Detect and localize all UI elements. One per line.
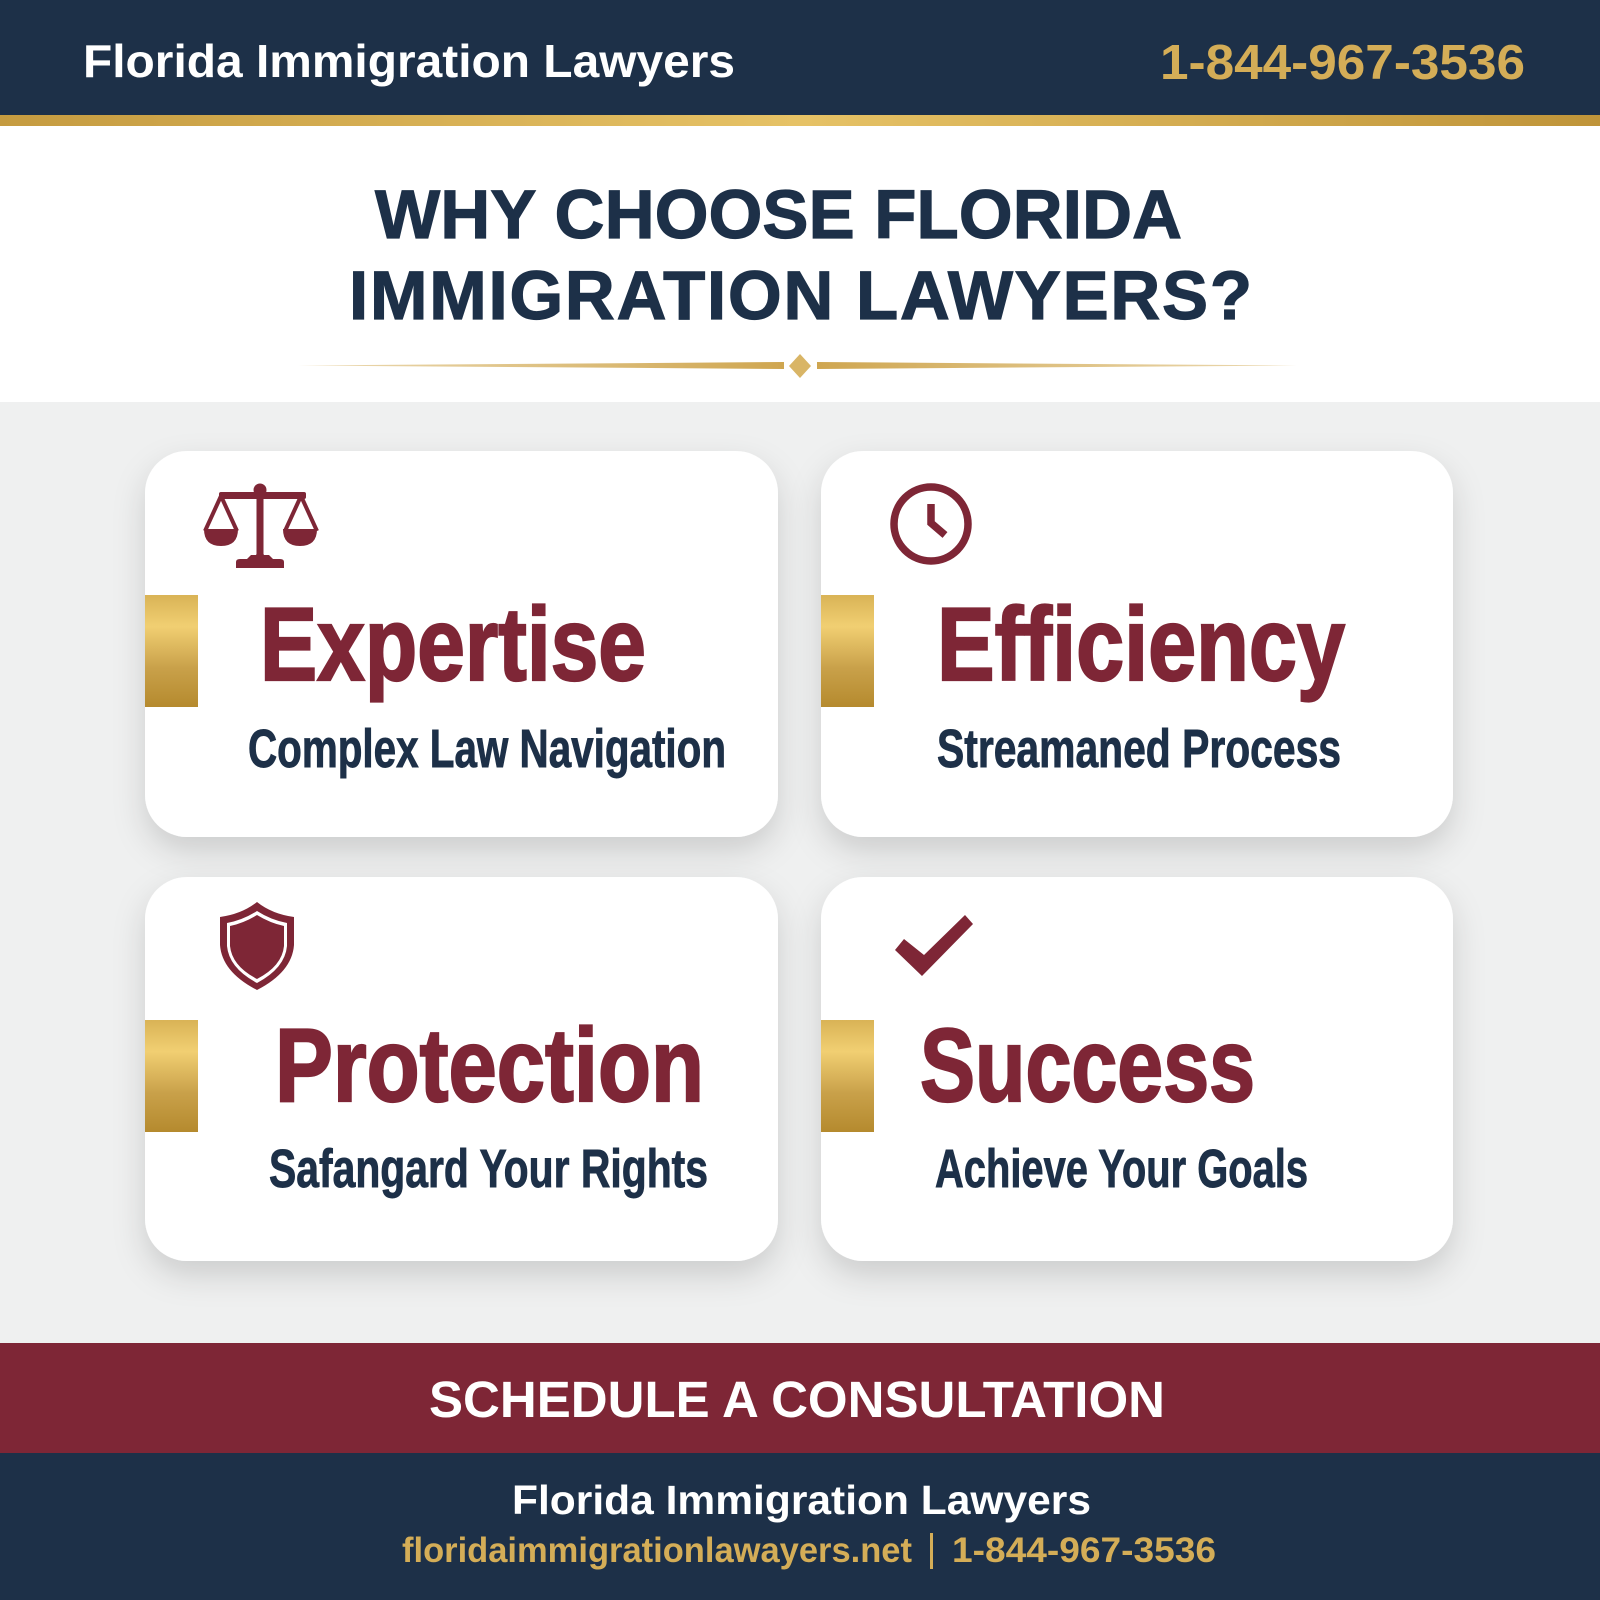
panel: Success xyxy=(821,877,1453,1261)
panel: Expertise xyxy=(145,451,778,837)
footer phone: 1-844-967-3536 xyxy=(952,1531,1216,1570)
footer firm name: Florida Immigration Lawyers xyxy=(512,1477,1091,1523)
card heading: Efficiency xyxy=(937,587,1345,703)
card subheading: Complex Law Navigation xyxy=(248,719,726,779)
card subheading: Safangard Your Rights xyxy=(269,1139,708,1199)
gold accent bar xyxy=(145,595,198,707)
icon: check mark xyxy=(895,915,973,976)
title divider with diamond xyxy=(298,354,1297,378)
panel: Protection xyxy=(145,877,778,1261)
icon: shield xyxy=(220,902,294,990)
header phone number: 1-844-967-3536 xyxy=(1160,36,1525,90)
header gold rule xyxy=(0,115,1600,126)
header bar xyxy=(0,0,1600,126)
card subheading: Streamaned Process xyxy=(937,719,1341,779)
icon: scales of justice xyxy=(204,484,317,568)
header firm name: Florida Immigration Lawyers xyxy=(83,35,735,87)
title line 1: WHY CHOOSE FLORIDA xyxy=(375,176,1182,253)
title section xyxy=(0,126,1600,402)
card subheading: Achieve Your Goals xyxy=(935,1139,1308,1199)
gold accent bar xyxy=(145,1020,198,1132)
gold accent bar xyxy=(821,595,874,707)
call to action text: SCHEDULE A CONSULTATION xyxy=(429,1371,1165,1428)
card heading: Expertise xyxy=(260,587,646,703)
footer xyxy=(0,1453,1600,1600)
icon: clock xyxy=(894,487,968,561)
gold accent bar xyxy=(821,1020,874,1132)
panel: Efficiency xyxy=(821,451,1453,837)
card heading: Success xyxy=(920,1008,1255,1124)
footer website: floridaimmigrationlawayers.net xyxy=(402,1531,912,1570)
title line 2: IMMIGRATION LAWYERS? xyxy=(349,257,1252,334)
card heading: Protection xyxy=(275,1008,704,1124)
call to action band xyxy=(0,1343,1600,1453)
footer separator xyxy=(930,1533,933,1569)
